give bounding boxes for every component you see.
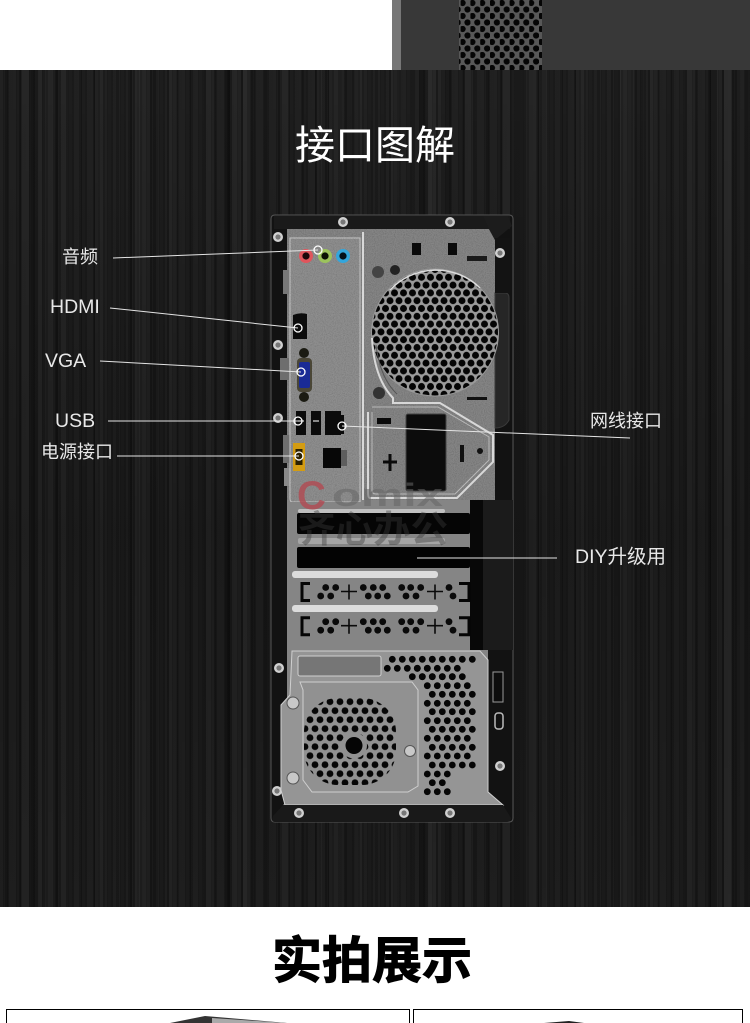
label: USB: USB	[55, 410, 95, 432]
VGA port	[297, 348, 312, 402]
label: DIY: DIY升级用	[575, 546, 666, 568]
right handle cut-out	[495, 293, 509, 428]
top band	[274, 216, 510, 229]
callout markers	[294, 246, 346, 460]
bottom band	[272, 805, 511, 822]
photo frame right	[413, 1009, 743, 1023]
ethernet port	[325, 411, 344, 435]
photo frame left	[6, 1009, 410, 1023]
label: HDMI: HDMI	[50, 296, 100, 318]
upper metal panel	[283, 229, 503, 805]
diagram: rear view of desktop chassis	[100, 214, 630, 822]
power port	[293, 443, 305, 471]
chassis body	[271, 215, 513, 822]
watermark: C	[297, 474, 326, 518]
left side tabs	[283, 270, 290, 294]
HDMI port	[293, 313, 307, 339]
callout lines	[100, 250, 630, 558]
fan vent	[371, 268, 499, 396]
I/O plate	[290, 232, 364, 502]
label: power: 电源接口	[41, 442, 113, 462]
watermark: omix	[332, 477, 443, 513]
watermark	[297, 474, 448, 550]
expansion slots	[287, 502, 470, 650]
watermark: 齐心办公	[298, 509, 448, 550]
lower right drive bay embossing	[368, 243, 493, 498]
label: audio: 音频	[62, 247, 98, 267]
audio ports	[299, 249, 350, 263]
label: network: 网线接口	[590, 411, 662, 431]
power supply plate	[281, 651, 503, 805]
heading: real photos: 实拍展示	[272, 933, 472, 989]
USB ports	[296, 411, 321, 435]
screws on frame	[272, 217, 505, 796]
title: 接口图解	[295, 124, 455, 168]
side vent holes	[384, 656, 476, 795]
top product photo strip	[392, 0, 750, 70]
label: VGA: VGA	[45, 350, 86, 372]
